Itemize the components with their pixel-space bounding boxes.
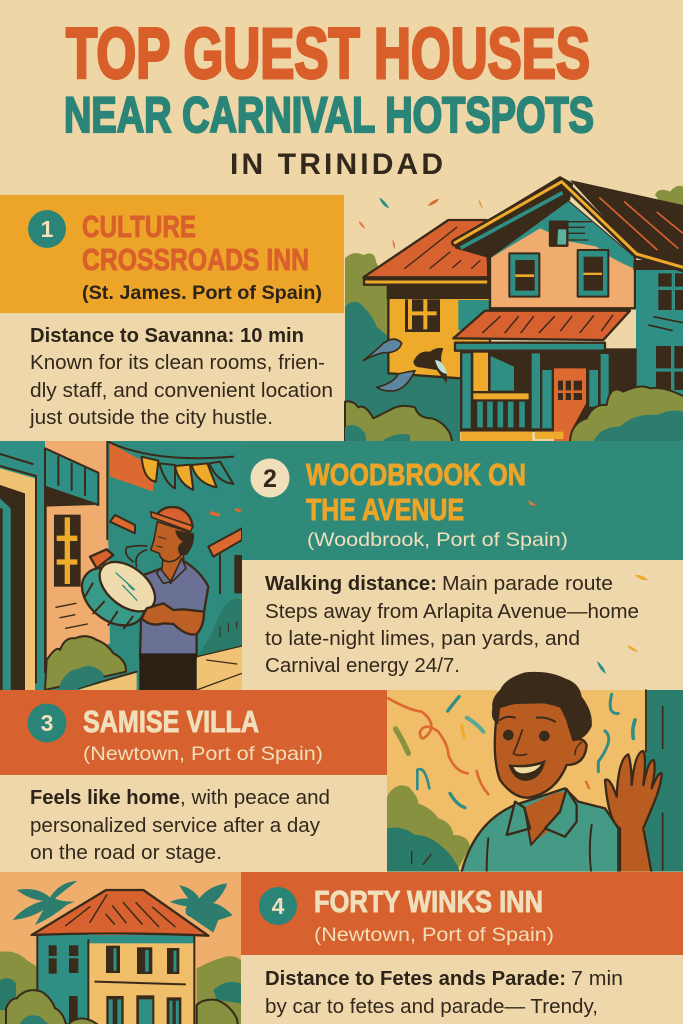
number badge 4: 4 (272, 893, 285, 919)
peach sky (0, 872, 241, 1024)
drum (80, 566, 144, 626)
confetti (528, 500, 648, 674)
number badge 4 (259, 887, 297, 925)
main house walls (453, 176, 683, 398)
bunting (108, 442, 241, 533)
description: Walking distance: (265, 573, 437, 595)
body background (0, 313, 345, 441)
description: , with peace and (180, 787, 330, 809)
header band (241, 441, 683, 560)
heading: CROSSROADS INN (82, 242, 309, 277)
right scenery (78, 528, 242, 690)
panel: Samise Villa (0, 690, 387, 872)
left wing (363, 220, 490, 383)
heading: FORTY WINKS INN (314, 884, 543, 919)
location: (Woodbrook, Port of Spain) (307, 529, 568, 551)
description: 7 min (571, 968, 623, 990)
header band (0, 690, 387, 775)
panel: Woodbrook on the Avenue (241, 441, 683, 690)
description (265, 968, 623, 1018)
illustration: guest house (345, 176, 683, 443)
description: Main parade route (442, 573, 613, 595)
description: dly staff, and convenient location (30, 380, 333, 402)
shrubs (345, 386, 683, 443)
location: (Newtown, Port of Spain) (314, 924, 554, 946)
sling (126, 546, 147, 567)
illustration: steelpan player (0, 441, 242, 690)
body background (0, 775, 387, 872)
waving hand (605, 751, 662, 873)
location: (Newtown, Port of Spain) (83, 743, 323, 765)
number badge 3: 3 (41, 710, 53, 736)
building (37, 933, 194, 1024)
number badge 3 (28, 704, 66, 742)
description: Known for its clean rooms, frien- (30, 352, 325, 374)
description: Feels like home (30, 787, 180, 809)
body (462, 788, 618, 873)
back foliage (345, 186, 683, 442)
heading (306, 457, 526, 527)
description (265, 573, 639, 677)
number badge 2 (250, 458, 290, 498)
title (64, 15, 594, 181)
confetti (359, 197, 483, 249)
description: on the road or stage. (30, 842, 222, 864)
title: IN TRINIDAD (230, 148, 443, 181)
head (492, 672, 592, 798)
heading: WOODBROOK ON (306, 457, 526, 492)
description: Distance to Fetes ands Parade: (265, 968, 566, 990)
bird silhouettes (363, 339, 447, 391)
number badge 1: 1 (41, 216, 54, 242)
description: personalized service after a day (30, 815, 320, 837)
windows (49, 945, 185, 1024)
teal doorway (645, 690, 683, 872)
upper windows (509, 250, 683, 390)
panel: Forty Winks Inn (241, 872, 683, 1024)
number badge 2: 2 (263, 465, 277, 493)
neck and collar (162, 553, 184, 583)
heading: THE AVENUE (306, 492, 464, 527)
illustration: inn with palms (0, 872, 241, 1024)
heading: CULTURE (82, 209, 196, 244)
description: to late-night limes, pan yards, and (265, 628, 580, 650)
panel: Culture Crossroads Inn (0, 195, 345, 441)
porch (453, 311, 637, 442)
description (29, 325, 333, 429)
header band (241, 872, 683, 955)
palm trees (13, 881, 233, 933)
shrubs (387, 785, 470, 872)
player (71, 507, 208, 690)
description: by car to fetes and parade— Trendy, (265, 996, 598, 1018)
number badge 1 (28, 210, 66, 248)
head (151, 522, 188, 562)
body background (241, 560, 683, 690)
roof (32, 890, 208, 936)
description: Distance to Savanna: 10 min (30, 325, 304, 347)
heading: SAMISE VILLA (83, 704, 259, 739)
yellow backdrop (387, 690, 645, 872)
shrubs (0, 951, 241, 1024)
roof lines (66, 895, 175, 927)
body background (241, 955, 683, 1024)
header band (0, 195, 344, 313)
description: just outside the city hustle. (29, 407, 273, 429)
arm (142, 603, 204, 634)
heading (82, 209, 309, 277)
street background (50, 441, 242, 690)
shrub (45, 636, 126, 690)
streamers and confetti (388, 694, 635, 808)
description: Carnival energy 24/7. (265, 655, 460, 677)
front shrubs (6, 990, 238, 1024)
description (30, 787, 330, 864)
location: (St. James. Port of Spain) (82, 282, 322, 304)
description: Steps away from Arlapita Avenue—home (265, 601, 639, 623)
illustration: waving guest (387, 672, 683, 873)
shirt and trousers (140, 560, 208, 657)
building (0, 441, 110, 690)
